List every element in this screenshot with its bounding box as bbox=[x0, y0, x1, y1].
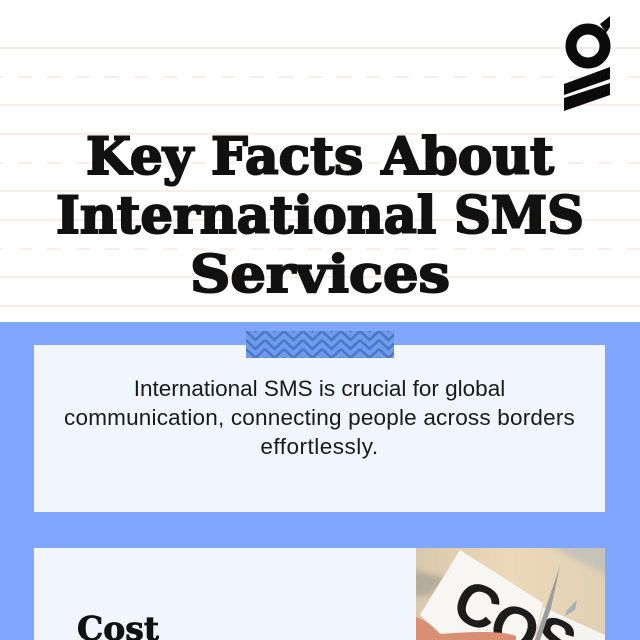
blue background panel bbox=[0, 322, 640, 640]
panel: introduction bbox=[34, 345, 605, 512]
intro text: communication, connecting people across borders bbox=[64, 405, 575, 430]
title: Services bbox=[190, 245, 450, 305]
decorative zigzag tape bbox=[246, 331, 394, 358]
intro text: effortlessly. bbox=[260, 434, 379, 459]
photo: scissors cutting the word cost bbox=[416, 548, 605, 640]
intro text: International SMS is crucial for global bbox=[134, 376, 505, 401]
title: International SMS bbox=[56, 186, 584, 246]
logo bbox=[564, 16, 610, 111]
title: Key Facts About bbox=[86, 127, 554, 187]
intro text bbox=[64, 376, 575, 459]
title bbox=[56, 127, 584, 305]
panel: cost bbox=[34, 548, 416, 640]
